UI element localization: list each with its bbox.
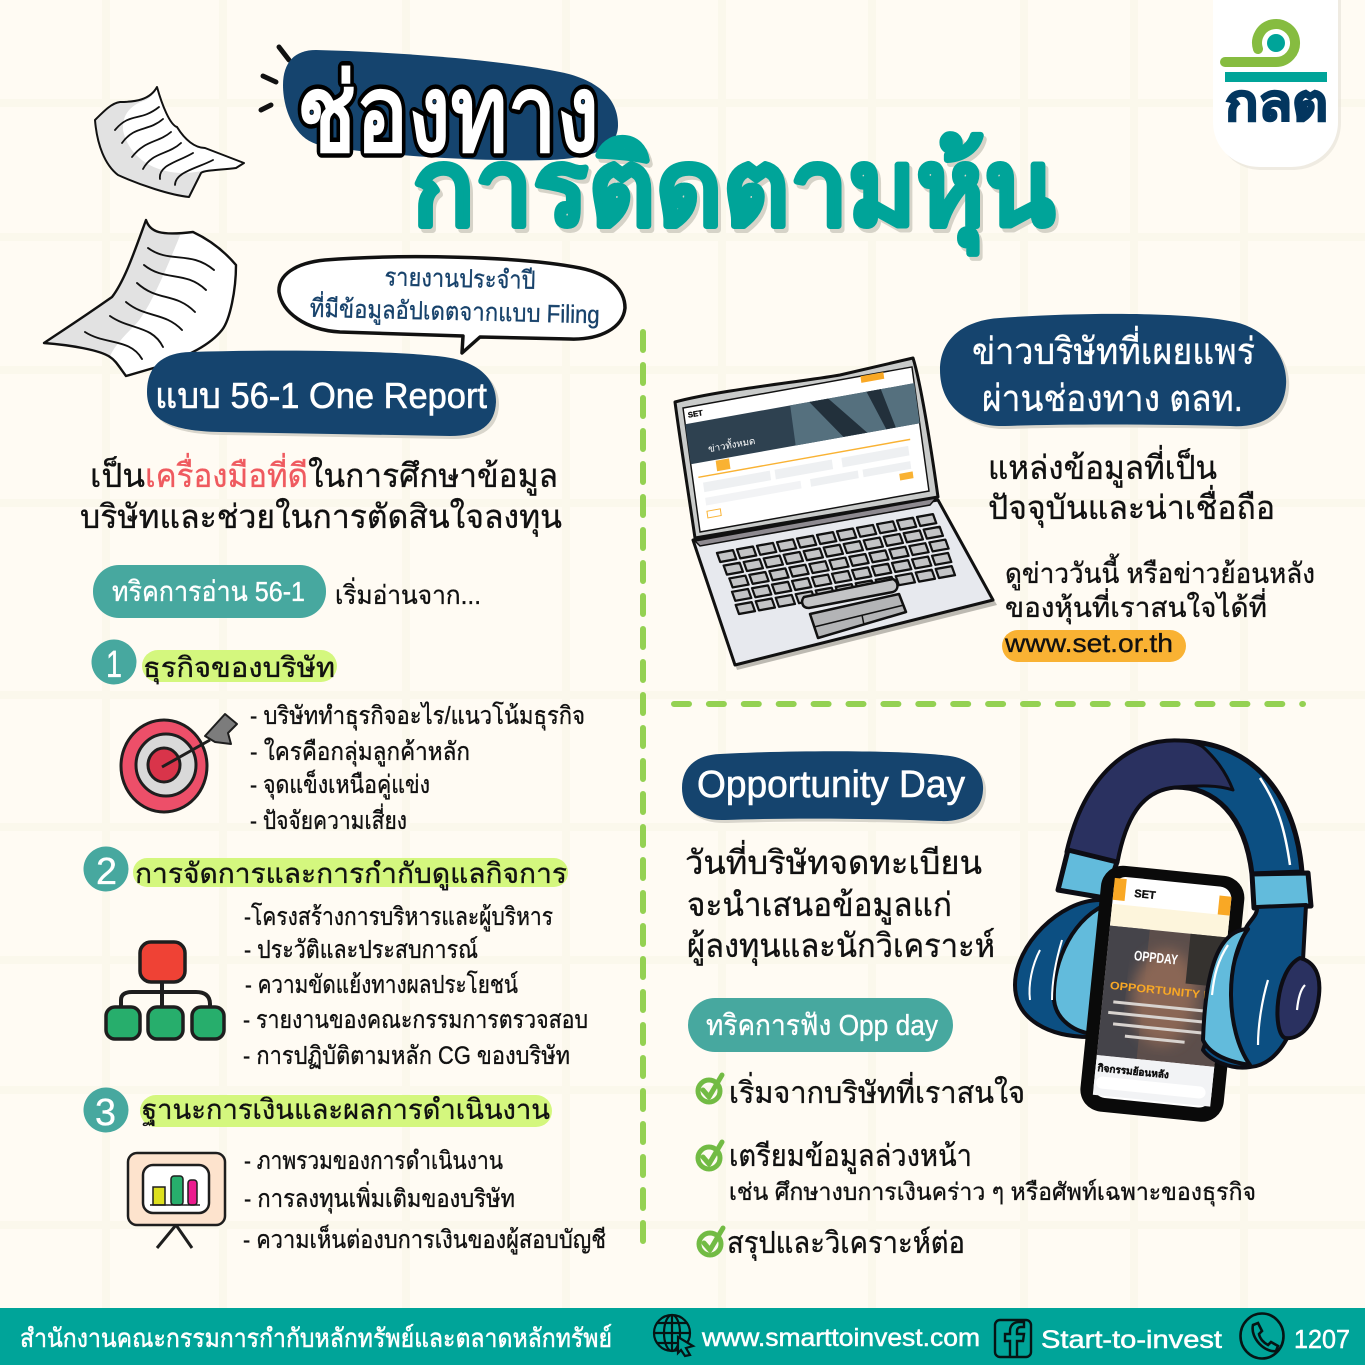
icon: presentation board <box>128 1153 225 1248</box>
section 2 heading: 2 <box>96 851 117 893</box>
text: opportunity day description: วันที่บริษัทจดทะเบียน <box>685 840 982 881</box>
illustration: headphones and phone <box>1015 741 1319 1124</box>
bubble text <box>309 262 601 330</box>
section 2 bullet list <box>243 902 588 1070</box>
text: reliable source: แหล่งข้อมูลที่เป็น <box>988 445 1217 488</box>
text: reliable source: ปัจจุบันและน่าเชื่อถือ <box>988 485 1275 528</box>
heading pill: SET news: ผ่านช่องทาง ตลท. <box>982 378 1243 419</box>
laptop keyboard <box>717 514 958 614</box>
checklist item 2 <box>698 1140 1256 1207</box>
left ear cup <box>1015 900 1110 1037</box>
footer organisation name: สำนักงานคณะกรรมการกำกับหลักทรัพย์และตลาดหลักทรัพย์ <box>20 1323 612 1353</box>
bubble text: ที่มีข้อมูลอัปเดตจากแบบ Filing <box>309 291 600 330</box>
heading pill: Opportunity Day <box>682 751 986 824</box>
text: opportunity day description: ผู้ลงทุนและนักวิเคราะห์ <box>687 927 995 966</box>
text: reliable source <box>988 445 1275 528</box>
text: opportunity day description: จะนำเสนอข้อมูลแก่ <box>687 886 952 925</box>
subheading pill: listening tips: ทริคการฟัง Opp day <box>706 1010 938 1042</box>
section 1 bullet list: - ปัจจัยความเสี่ยง <box>250 803 407 835</box>
intro text: บริษัทและช่วยในการตัดสินใจลงทุน <box>80 498 562 537</box>
intro text: เครื่องมือที่ดี <box>145 453 308 494</box>
section 1 heading <box>92 640 337 686</box>
section 2 bullet list: -โครงสร้างการบริหารและผู้บริหาร <box>244 902 553 932</box>
phone: SET <box>1134 888 1156 902</box>
text: opportunity day description <box>685 840 995 966</box>
title blob <box>283 50 618 160</box>
headband <box>1058 741 1311 908</box>
logo: SEC Thailand badge: กลต <box>1225 75 1328 131</box>
text: where to read news: ดูข่าววันนี้ หรือข่าวย้อนหลัง <box>1005 553 1315 591</box>
laptop screen: SET <box>687 408 704 420</box>
intro text: เป็น <box>90 456 145 494</box>
section 2 bullet list: - ประวัติและประสบการณ์ <box>244 936 478 964</box>
logo: SEC Thailand badge <box>1213 0 1341 170</box>
right ear cup <box>1203 905 1319 1068</box>
icon: globe with cursor <box>654 1315 693 1356</box>
section 2 bullet list: - รายงานของคณะกรรมการตรวจสอบ <box>243 1006 588 1034</box>
checklist item 2: เตรียมข้อมูลล่วงหน้า <box>729 1140 972 1174</box>
icon: facebook <box>995 1320 1031 1357</box>
section 2 heading <box>84 846 568 893</box>
facebook name: Start-to-invest <box>1041 1326 1222 1354</box>
section 1 bullet list: - ใครคือกลุ่มลูกค้าหลัก <box>250 737 470 767</box>
section 3 heading: ฐานะการเงินและผลการดำเนินงาน <box>142 1094 550 1126</box>
section 3 heading <box>84 1088 552 1134</box>
title block <box>261 47 1055 254</box>
section 1 heading: 1 <box>106 644 122 686</box>
phone: OPPDAY <box>1133 947 1179 968</box>
laptop screen <box>683 367 929 532</box>
section 3 bullet list: - ภาพรวมของการดำเนินงาน <box>244 1147 503 1175</box>
phone <box>1078 864 1246 1124</box>
start reading label: เริ่มอ่านจาก... <box>335 577 481 610</box>
section 1 bullet list: - จุดแข็งเหนือคู่แข่ง <box>250 769 430 800</box>
section 1 bullet list: - บริษัททำธุรกิจอะไร/แนวโน้มธุรกิจ <box>250 701 585 731</box>
laptop screen: ข่าวทั้งหมด <box>707 433 756 455</box>
illustration: small floating paper <box>95 87 244 197</box>
subheading pill: listening tips <box>688 998 953 1052</box>
icon: telephone <box>1240 1314 1284 1358</box>
section 3 bullet list: - การลงทุนเพิ่มเติมของบริษัท <box>244 1181 515 1214</box>
icon: org chart <box>106 942 224 1039</box>
checklist item 3: สรุปและวิเคราะห์ต่อ <box>727 1226 965 1262</box>
link pill: set.or.th: www.set.or.th <box>1004 628 1173 658</box>
illustration: laptop <box>675 358 997 670</box>
heading pill: SET news <box>940 314 1289 429</box>
footer bar <box>0 1308 1365 1365</box>
website: www.smarttoinvest.com <box>701 1324 980 1352</box>
text: where to read news <box>1005 553 1315 625</box>
heading pill: 56-1 One Report: แบบ 56-1 One Report <box>155 375 487 416</box>
bubble text: รายงานประจำปี <box>384 263 536 295</box>
title line 1: ช่องทาง <box>297 53 599 174</box>
hotline: 1207 <box>1294 1324 1350 1354</box>
section 2 bullet list: - ความขัดแย้งทางผลประโยชน์ <box>245 970 518 999</box>
heading pill: 56-1 One Report <box>147 351 499 439</box>
section 2 heading: การจัดการและการกำกับดูแลกิจการ <box>135 858 567 891</box>
section 1 heading: ธุรกิจของบริษัท <box>143 652 335 685</box>
checklist item 2: เช่น ศึกษางบการเงินคร่าว ๆ หรือศัพท์เฉพาะของธุรกิจ <box>729 1178 1256 1207</box>
subheading pill: reading tips <box>93 565 326 618</box>
section 3 bullet list <box>243 1147 606 1255</box>
title line 2: การติดตามหุ้น <box>412 127 1055 254</box>
text: where to read news: ของหุ้นที่เราสนใจได้ที่ <box>1005 588 1267 625</box>
intro text: ในการศึกษาข้อมูล <box>308 457 558 496</box>
icon: target with dart <box>121 714 237 812</box>
subheading pill: reading tips: ทริคการอ่าน 56-1 <box>112 576 305 607</box>
section 3 bullet list: - ความเห็นต่องบการเงินของผู้สอบบัญชี <box>243 1224 606 1255</box>
section 3 heading: 3 <box>95 1092 116 1134</box>
heading pill: SET news: ข่าวบริษัทที่เผยแพร่ <box>972 325 1255 372</box>
intro text <box>80 453 562 537</box>
title sparks <box>261 47 289 110</box>
illustration: large floating paper <box>44 220 236 376</box>
speech bubble <box>279 257 625 353</box>
phone: OPPORTUNITY DA <box>1109 980 1222 1003</box>
heading pill: Opportunity Day: Opportunity Day <box>697 764 965 806</box>
section 1 bullet list <box>250 701 585 835</box>
checklist item 1: เริ่มจากบริษัทที่เราสนใจ <box>729 1072 1025 1110</box>
section 2 bullet list: - การปฏิบัติตามหลัก CG ของบริษัท <box>243 1042 570 1070</box>
phone: กิจกรรมย้อนหลัง <box>1097 1062 1169 1081</box>
